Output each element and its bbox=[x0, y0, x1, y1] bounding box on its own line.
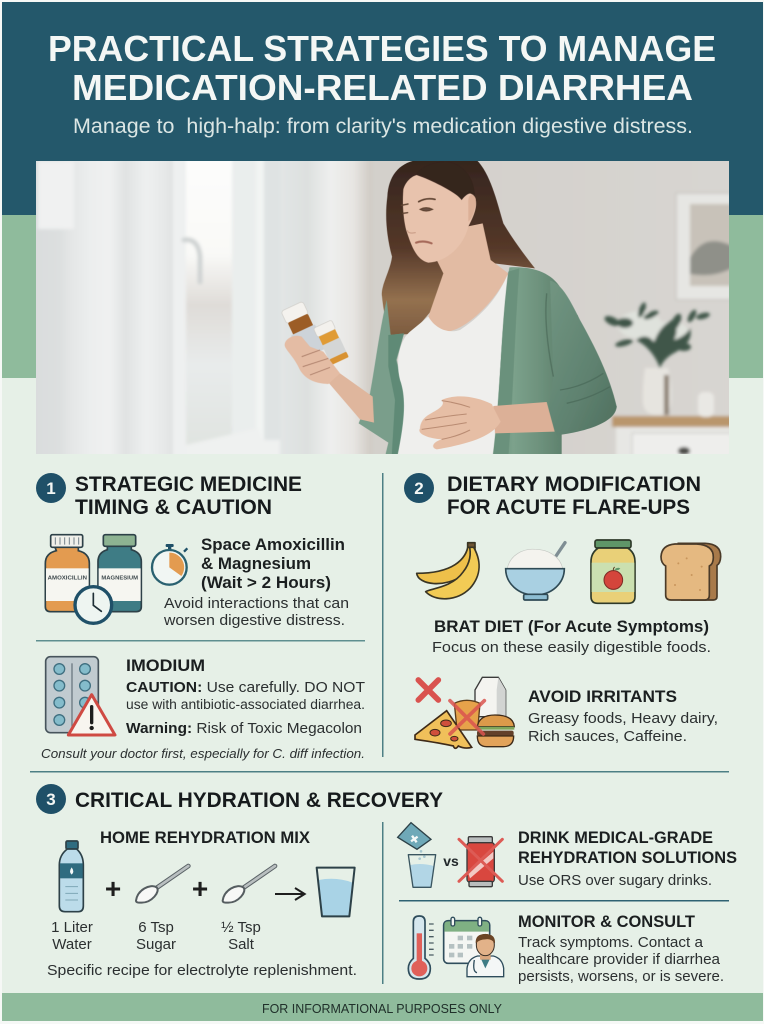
green band behind photo bbox=[2, 215, 763, 378]
section 2 heading: FOR ACUTE FLARE-UPS bbox=[447, 496, 690, 519]
text: avoid irritants bbox=[528, 687, 718, 745]
text: brat diet: BRAT DIET (For Acute Symptoms) bbox=[434, 617, 709, 636]
text: brat diet: Focus on these easily digestible foods. bbox=[432, 639, 711, 656]
header band bbox=[2, 2, 763, 215]
text: space amoxicillin and magnesium: & Magnesium bbox=[201, 555, 311, 573]
icon: bowl of rice bbox=[506, 543, 565, 600]
icon: blister pack with warning triangle bbox=[46, 657, 115, 735]
section 3 heading: 3 bbox=[46, 790, 56, 809]
text: imodium caution: CAUTION: Use carefully. DO NOT bbox=[126, 679, 365, 696]
text: space amoxicillin and magnesium: Space Amoxicillin bbox=[201, 536, 345, 554]
footer bar bbox=[2, 993, 763, 1021]
text: brat diet bbox=[432, 617, 711, 656]
section 2 heading bbox=[404, 473, 701, 519]
text: avoid irritants: Greasy foods, Heavy dairy, bbox=[528, 710, 718, 727]
photo plant bbox=[603, 301, 711, 368]
ingredient labels: Salt bbox=[228, 936, 255, 953]
plus sign: + bbox=[105, 873, 121, 904]
section 1 heading: TIMING & CAUTION bbox=[75, 496, 272, 519]
icon: ors sachet and glass versus crossed-out soda: vs bbox=[443, 853, 459, 869]
icon: applesauce jar bbox=[591, 540, 635, 603]
plus sign: + bbox=[192, 873, 208, 904]
icon: bananas bbox=[417, 543, 479, 599]
text: monitor and consult: Track symptoms. Contact a bbox=[518, 934, 704, 951]
text: imodium caution: use with antibiotic-associated diarrhea. bbox=[126, 697, 365, 712]
icon: calendar and doctor bbox=[444, 917, 504, 977]
text: space amoxicillin and magnesium: worsen digestive distress. bbox=[163, 612, 345, 629]
text: space amoxicillin and magnesium bbox=[163, 536, 349, 629]
section 3 heading: CRITICAL HYDRATION & RECOVERY bbox=[75, 789, 443, 812]
footer bar: FOR INFORMATIONAL PURPOSES ONLY bbox=[262, 1001, 502, 1016]
text: drink medical-grade solutions: Use ORS over sugary drinks. bbox=[518, 872, 712, 889]
ingredient labels: Sugar bbox=[136, 936, 176, 953]
icon: sugar spoon bbox=[136, 866, 188, 903]
section 3 heading bbox=[36, 784, 443, 814]
ingredient labels: 1 Liter bbox=[51, 919, 93, 936]
icon: water bottle bbox=[59, 841, 83, 912]
section 2 heading: 2 bbox=[414, 479, 424, 498]
heading: home rehydration mix: HOME REHYDRATION MIX bbox=[100, 828, 311, 847]
text: avoid irritants: AVOID IRRITANTS bbox=[528, 687, 677, 706]
woman figure bbox=[280, 160, 617, 457]
ingredient labels: 6 Tsp bbox=[138, 919, 174, 936]
photo background room bbox=[30, 155, 735, 460]
icon: glass of water bbox=[317, 868, 355, 916]
icon: toast bbox=[661, 543, 721, 600]
icon: irritant foods crossed out bbox=[415, 677, 514, 748]
section 1 heading: STRATEGIC MEDICINE bbox=[75, 473, 302, 496]
icon: amoxicillin and magnesium bottles with clock: AMOXICILLIN bbox=[48, 575, 87, 581]
text: space amoxicillin and magnesium: (Wait > 2 Hours) bbox=[201, 574, 331, 592]
icon: stopwatch bbox=[152, 544, 187, 585]
title: PRACTICAL STRATEGIES TO MANAGE bbox=[48, 28, 716, 69]
text: drink medical-grade solutions: REHYDRATION SOLUTIONS bbox=[518, 848, 737, 867]
ingredient labels: ½ Tsp bbox=[221, 919, 261, 936]
section 1 heading: 1 bbox=[46, 479, 56, 498]
icon: thermometer bbox=[408, 916, 434, 979]
title: MEDICATION-RELATED DIARRHEA bbox=[72, 67, 693, 108]
text: monitor and consult: healthcare provider if diarrhea bbox=[518, 951, 721, 968]
recipe note: Specific recipe for electrolyte replenishment. bbox=[47, 962, 357, 979]
icon: amoxicillin and magnesium bottles with clock: MAGNESIUM bbox=[101, 575, 138, 581]
text: monitor and consult: MONITOR & CONSULT bbox=[518, 912, 696, 931]
text: monitor and consult: persists, worsens, or is severe. bbox=[518, 968, 724, 985]
section 2 heading: DIETARY MODIFICATION bbox=[447, 473, 701, 496]
ingredient labels: Water bbox=[52, 936, 92, 953]
ingredient labels bbox=[51, 919, 261, 953]
text: imodium caution: Consult your doctor first, especially for C. diff infection. bbox=[41, 746, 365, 761]
icon: amoxicillin and magnesium bottles with clock bbox=[45, 535, 141, 623]
text: imodium caution: IMODIUM bbox=[126, 656, 205, 675]
hero photo: woman reading medicine bottles holding her stomach bbox=[30, 155, 735, 460]
text: drink medical-grade solutions bbox=[518, 828, 737, 889]
title bbox=[48, 28, 716, 108]
text: drink medical-grade solutions: DRINK MEDICAL-GRADE bbox=[518, 828, 713, 847]
icon: ors sachet and glass versus crossed-out soda bbox=[398, 823, 502, 887]
arrow bbox=[275, 888, 305, 900]
text: imodium caution bbox=[41, 656, 365, 761]
icon: salt spoon bbox=[223, 866, 275, 903]
text: imodium caution: Warning: Risk of Toxic Megacolon bbox=[126, 721, 362, 737]
text: monitor and consult bbox=[518, 912, 724, 985]
section 1 heading bbox=[36, 473, 302, 519]
text: avoid irritants: Rich sauces, Caffeine. bbox=[528, 728, 687, 745]
subtitle: Manage to high-halp: from clarity's medication digestive distress. bbox=[73, 115, 693, 138]
text: space amoxicillin and magnesium: Avoid interactions that can bbox=[164, 595, 349, 612]
